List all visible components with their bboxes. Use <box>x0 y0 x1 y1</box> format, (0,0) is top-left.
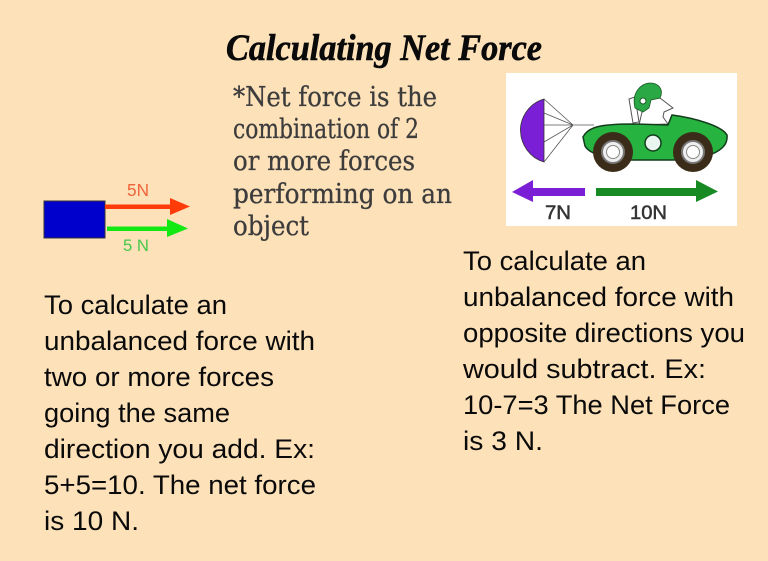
text block: opposite direction explanation <box>462 246 745 456</box>
text block: same direction explanation: unbalanced force with <box>44 326 315 356</box>
wheels <box>593 132 713 172</box>
arrow: green 10N <box>596 180 718 202</box>
text block: net force definition: or more forces <box>233 146 415 177</box>
text block: same direction explanation <box>44 290 316 536</box>
car window <box>645 135 661 151</box>
text block: same direction explanation: 5+5=10. The net force <box>44 470 316 500</box>
text block: opposite direction explanation: opposite directions you <box>463 318 745 348</box>
label: 7N: 7N <box>545 203 571 224</box>
text block: same direction explanation: is 10 N. <box>44 506 139 536</box>
seat <box>629 97 639 123</box>
label: red 5N: 5N <box>127 180 149 200</box>
text block: opposite direction explanation: 10-7=3 The Net Force <box>463 390 730 420</box>
text block: net force definition: performing on an <box>233 179 452 210</box>
label: 10N: 10N <box>630 203 667 224</box>
torso and head <box>639 98 673 125</box>
helmet <box>634 83 661 112</box>
car body <box>583 115 727 160</box>
text block: net force definition <box>233 82 452 242</box>
text block: same direction explanation: To calculate an <box>44 290 227 320</box>
parachute <box>520 99 594 162</box>
text block: same direction explanation: two or more forces <box>44 362 274 392</box>
title: Calculating Net Force <box>226 28 542 69</box>
arrow: purple 7N <box>512 180 585 202</box>
blue block <box>44 201 105 238</box>
white panel <box>506 73 737 226</box>
text block: net force definition: object <box>233 211 309 242</box>
driver <box>629 83 673 125</box>
text block: net force definition: combination of 2 <box>233 114 419 145</box>
image: car with parachute <box>506 73 737 226</box>
text block: opposite direction explanation: To calculate an <box>463 246 646 276</box>
text block: net force definition: *Net force is the <box>233 82 437 113</box>
arrow: green 5N <box>107 219 188 237</box>
text block: opposite direction explanation: is 3 N. <box>463 426 543 456</box>
text block: opposite direction explanation: unbalanced force with <box>463 282 734 312</box>
diagram: same direction forces <box>44 180 190 255</box>
text block: same direction explanation: going the same <box>44 398 230 428</box>
arrow: red 5N <box>105 198 190 215</box>
text block: same direction explanation: direction you add. Ex: <box>44 434 315 464</box>
text block: opposite direction explanation: would subtract. Ex: <box>462 354 706 384</box>
label: green 5N: 5 N <box>123 236 149 255</box>
